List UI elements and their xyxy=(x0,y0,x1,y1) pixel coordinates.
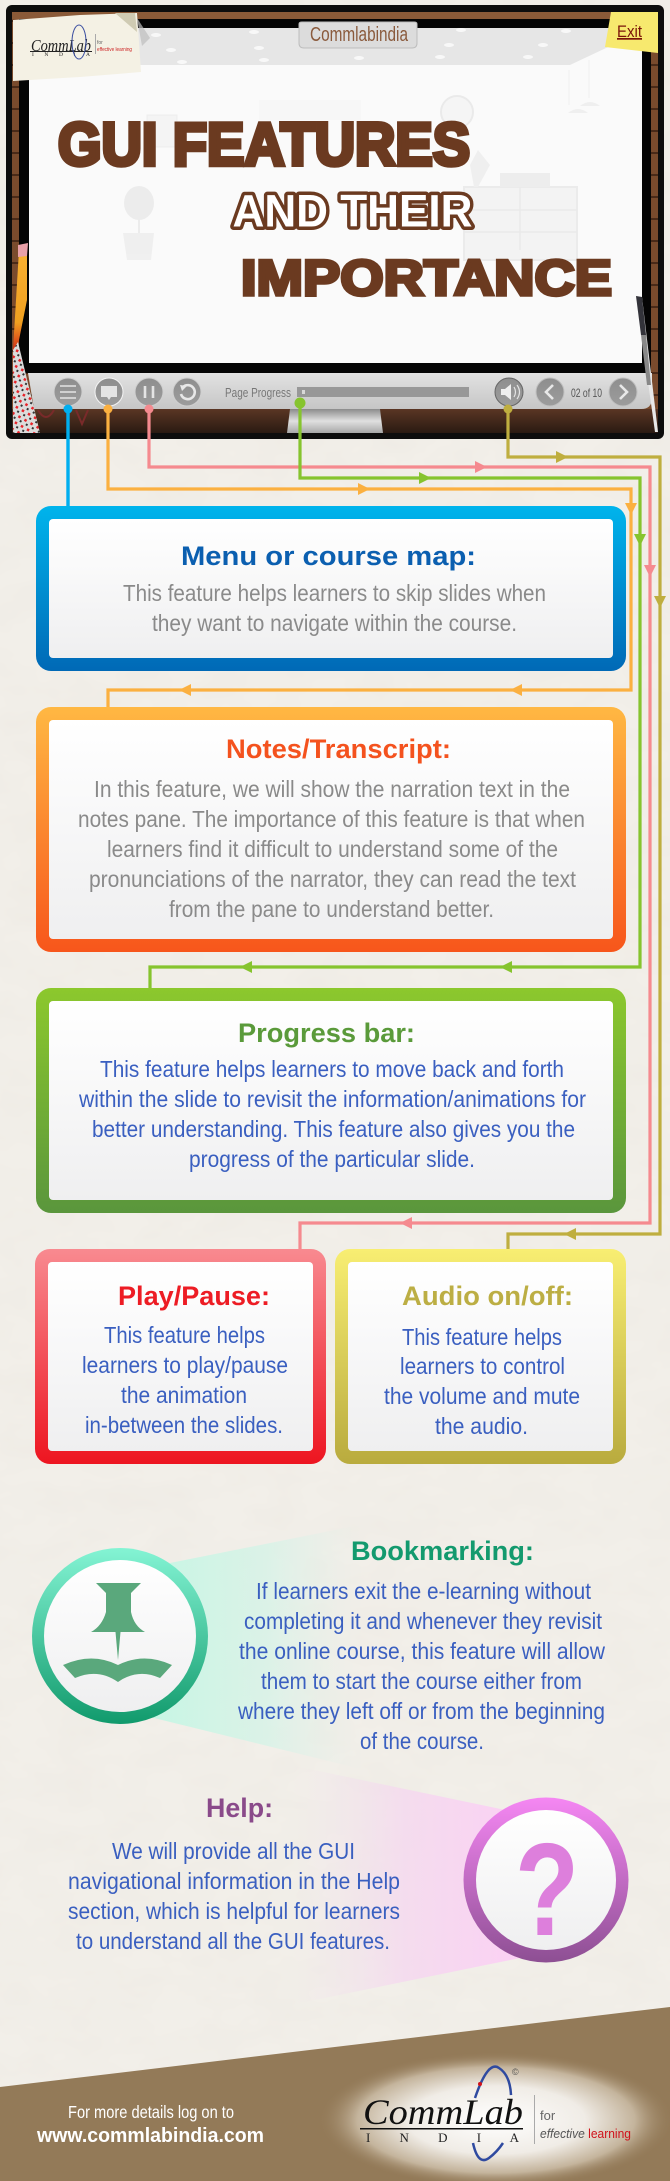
pause button xyxy=(135,378,163,406)
footer logo: for xyxy=(540,2108,556,2123)
body text: learners to play/pause xyxy=(82,1352,288,1378)
light beam xyxy=(290,1765,520,2005)
title: IMPORTANCE xyxy=(241,250,612,306)
exit sticky note xyxy=(605,12,658,53)
slide counter: 02 of 10 xyxy=(571,386,602,400)
top tab: Commlabindia: Commlabindia xyxy=(310,24,409,46)
heading: Progress bar: xyxy=(238,1018,415,1048)
body text: the animation xyxy=(121,1382,247,1408)
body text: This feature helps learners to move back and forth xyxy=(100,1056,564,1082)
title: GUI FEATURES xyxy=(58,111,470,178)
body text: to understand all the GUI features. xyxy=(76,1928,390,1954)
body text: notes pane. The importance of this feature is that when xyxy=(78,806,585,832)
body text: We will provide all the GUI xyxy=(112,1838,355,1864)
light beam xyxy=(150,1524,365,1770)
panel: notes/transcript xyxy=(36,707,626,952)
body text: section, which is helpful for learners xyxy=(68,1898,400,1924)
footer logo: effective learning xyxy=(540,2126,631,2141)
body text: progress of the particular slide. xyxy=(189,1146,475,1172)
body text xyxy=(82,1322,288,1438)
body text: better understanding. This feature also gives you the xyxy=(92,1116,575,1142)
connector: play/pause (pink) xyxy=(144,404,656,1250)
logo note: for xyxy=(97,40,103,46)
top tab: Commlabindia xyxy=(299,22,417,48)
heading: Play/Pause: xyxy=(118,1281,270,1311)
heading: Menu or course map: xyxy=(181,541,476,571)
connector: menu (blue) xyxy=(64,404,72,508)
next button xyxy=(609,378,637,406)
logo note: INDIA xyxy=(32,52,90,58)
body text: learners find it difficult to understand some of the xyxy=(107,836,558,862)
footer logo: © xyxy=(512,2067,519,2077)
title xyxy=(58,111,612,306)
body text: If learners exit the e-learning without xyxy=(256,1578,591,1604)
body text: them to start the course either from xyxy=(261,1668,582,1694)
body text xyxy=(68,1838,400,1954)
icon: pushpin on book xyxy=(32,1548,208,1724)
connector: audio (olive) xyxy=(504,404,666,1252)
exit sticky note: Exit xyxy=(617,22,642,41)
body text: within the slide to revisit the information/animations for xyxy=(78,1086,586,1112)
logo note: effective learning xyxy=(97,47,132,53)
body text: pronunciations of the narrator, they can read the text xyxy=(89,866,576,892)
audio button xyxy=(495,378,523,406)
body text: completing it and whenever they revisit xyxy=(244,1608,602,1634)
progress track xyxy=(297,387,469,397)
body text: navigational information in the Help xyxy=(68,1868,400,1894)
footer call to action: For more details log on to xyxy=(68,2102,234,2122)
pen xyxy=(636,296,658,432)
body text: in-between the slides. xyxy=(85,1412,283,1438)
body text xyxy=(78,776,585,922)
panel: help xyxy=(68,1765,628,2005)
logo note xyxy=(13,13,150,81)
heading: Audio on/off: xyxy=(402,1281,573,1311)
panel: audio on/off xyxy=(335,1249,626,1464)
logo note: CommLab xyxy=(31,36,91,55)
page progress label: Page Progress xyxy=(225,385,291,400)
title: AND THEIR xyxy=(232,186,472,236)
connector: progress (green) xyxy=(150,398,646,990)
icon: question mark: ? xyxy=(515,1816,579,1963)
body text: In this feature, we will show the narration text in the xyxy=(94,776,570,802)
panel: progress bar xyxy=(36,988,626,1213)
body text: learners to control xyxy=(400,1353,565,1379)
body text: This feature helps xyxy=(402,1324,562,1350)
footer call to action: www.commlabindia.com xyxy=(36,2125,264,2147)
previous button xyxy=(536,378,564,406)
pencil and pen holder xyxy=(13,243,40,433)
body text: where they left off or from the beginning xyxy=(237,1698,605,1724)
body text: of the course. xyxy=(360,1728,484,1754)
footer logo xyxy=(318,2052,670,2181)
body text: the audio. xyxy=(435,1413,528,1439)
body text: the volume and mute xyxy=(384,1383,580,1409)
panel: bookmarking xyxy=(32,1524,606,1770)
panel: menu or course map xyxy=(36,506,626,671)
replay button xyxy=(173,378,201,406)
desk and stand xyxy=(12,409,658,433)
body text xyxy=(78,1056,586,1172)
body text: from the pane to understand better. xyxy=(169,896,494,922)
footer logo: I N D I A xyxy=(366,2130,520,2145)
menu button xyxy=(54,378,82,406)
body text: the online course, this feature will allow xyxy=(239,1638,606,1664)
body text: This feature helps learners to skip slides when xyxy=(123,580,546,606)
panel: play/pause xyxy=(35,1249,326,1464)
footer logo: CommLab xyxy=(363,2092,523,2132)
heading: Help: xyxy=(206,1793,273,1823)
control bar xyxy=(28,373,652,409)
connector: notes (orange) xyxy=(104,404,637,709)
body text xyxy=(384,1324,580,1439)
footer call to action xyxy=(36,2102,264,2147)
monitor frame xyxy=(6,5,664,439)
notes button xyxy=(95,378,123,406)
body text xyxy=(123,580,546,636)
body text xyxy=(237,1578,606,1754)
heading: Bookmarking: xyxy=(351,1536,534,1566)
monitor header panel xyxy=(6,5,664,439)
heading: Notes/Transcript: xyxy=(226,734,451,764)
screen with faint room scene xyxy=(29,28,642,363)
footer band xyxy=(0,2007,670,2181)
body text: they want to navigate within the course. xyxy=(152,610,517,636)
body text: This feature helps xyxy=(104,1322,265,1348)
icon: question mark xyxy=(464,1798,628,1963)
